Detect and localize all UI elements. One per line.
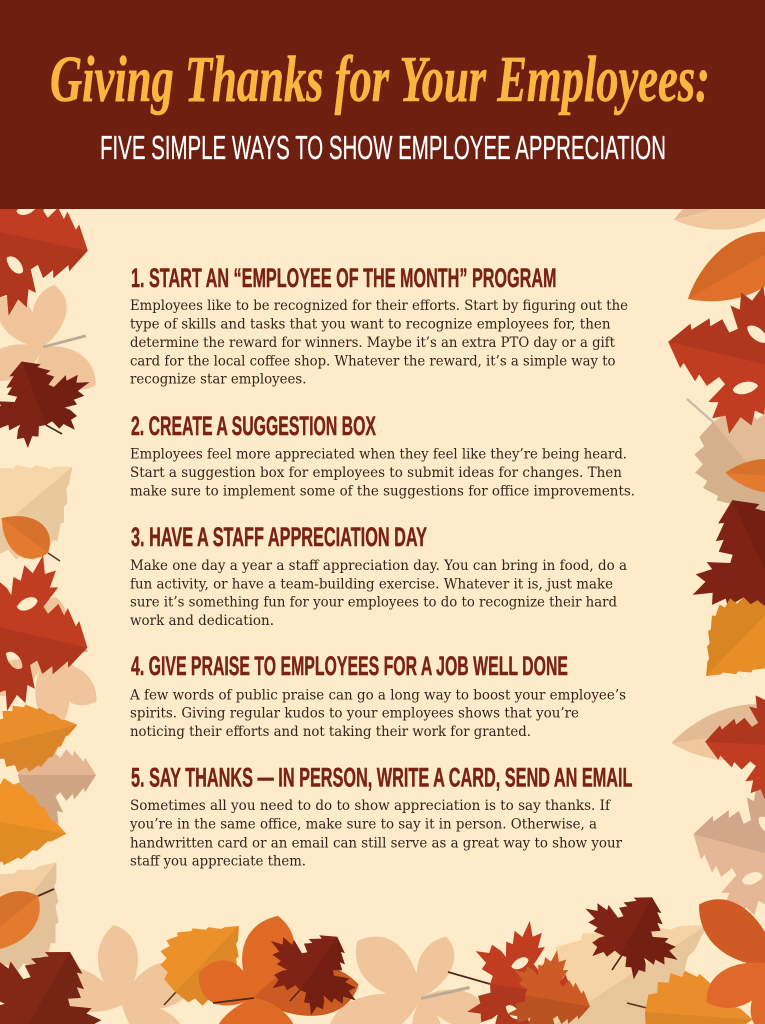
body 2: make sure to implement some of the suggestions for office improvements.: [130, 484, 635, 500]
section 2: [130, 411, 635, 500]
leaf: pale oval right: [667, 698, 765, 771]
body 5: staff you appreciate them.: [130, 854, 306, 870]
leaf: orange serrated left: [0, 772, 74, 877]
body 5: handwritten card or an email can still serve as a great way to show your: [130, 835, 622, 851]
body 3: work and dedication.: [130, 613, 274, 629]
leaf: dark maple bottom: [249, 907, 380, 1024]
body 1: type of skills and tasks that you want to recognize employees for, then: [130, 316, 611, 332]
leaf: orange oval small right: [724, 456, 765, 495]
leaf: dusty maple lower right: [674, 761, 765, 939]
leaf: pale chestnut bottom centre: [320, 922, 494, 1024]
leaf: dusty serrated right: [675, 390, 765, 554]
leaf: pale serrated bottom right: [495, 871, 743, 1024]
body 3: fun activity, or have a team-building exercise. Whatever it is, just make: [130, 576, 613, 592]
heading 3: 3. HAVE A STAFF APPRECIATION DAY: [131, 522, 427, 552]
leaf: golden serrated: [0, 692, 86, 779]
leaf: pale serrated left: [0, 428, 104, 578]
bottom leaf border: [0, 871, 756, 1024]
leaf: pale chestnut upper left: [0, 281, 104, 414]
leaf: pale chestnut mid left: [0, 593, 105, 729]
body 3: sure it’s something fun for your employees to do to recognize their hard: [130, 595, 617, 611]
body 1: [130, 298, 628, 388]
body 1: determine the reward for winners. Maybe it’s an extra PTO day or a gift: [130, 335, 615, 351]
leaf: red maple top left: [0, 147, 104, 329]
leaf: dark maple bottom right: [567, 872, 698, 993]
body 2: Employees feel more appreciated when they feel like they’re being heard.: [130, 446, 627, 462]
leaf: orange oval right: [674, 216, 765, 323]
body 1: recognize star employees.: [130, 372, 306, 388]
leaf: dark maple bottom left: [0, 916, 132, 1024]
leaf: dark maple right: [663, 468, 765, 652]
section 3: [130, 522, 627, 629]
section 4: [129, 651, 626, 740]
leaf: red maple mid left: [0, 542, 105, 725]
header band: [0, 0, 765, 209]
body 5: [129, 798, 622, 870]
section 5: [129, 763, 632, 870]
leaf: red maple bottom: [448, 914, 584, 1024]
leaf: golden serrated right: [677, 582, 765, 704]
body 2: Start a suggestion box for employees to submit ideas for changes. Then: [130, 465, 622, 481]
section 1: [130, 263, 628, 388]
leaf: pale serrated lower left: [0, 830, 97, 992]
body 1: card for the local coffee shop. Whatever the reward, it’s a simple way to: [130, 353, 616, 369]
body 4: [129, 687, 626, 740]
leaf: orange oval left: [0, 503, 60, 569]
body 1: Employees like to be recognized for their efforts. Start by figuring out the: [130, 298, 628, 314]
right leaf border: [651, 166, 765, 1024]
leaf: pale chestnut bottom left: [39, 925, 203, 1024]
leaf: dusty maple: [1, 717, 96, 833]
body 3: [130, 558, 627, 629]
body 5: you’re in the same office, make sure to say it in person. Otherwise, a: [129, 817, 597, 833]
body 3: Make one day a year a staff appreciation day. You can bring in food, do a: [130, 558, 627, 574]
leaf: orange chestnut bottom: [189, 908, 360, 1024]
leaf: golden serrated bottom: [145, 897, 269, 1021]
leaf: red maple right: [651, 268, 765, 450]
leaf: red maple lower right: [702, 684, 765, 806]
body 4: spirits. Giving regular kudos to your employees shows that you’re: [130, 706, 579, 722]
body 2: [130, 446, 635, 500]
leaf: rust maple bottom: [502, 944, 599, 1024]
heading 2: 2. CREATE A SUGGESTION BOX: [131, 411, 376, 441]
body 4: A few words of public praise can go a long way to boost your employee’s: [129, 687, 626, 703]
leaf: orange chestnut right: [686, 884, 765, 1024]
leaf: orange oval lower left: [0, 878, 54, 969]
leaf: dark maple left: [0, 341, 104, 459]
left leaf border: [0, 147, 105, 992]
body 5: Sometimes all you need to do to show appreciation is to say thanks. If: [130, 798, 611, 814]
leaf: pale oval top right: [667, 166, 765, 244]
leaf: golden bottom right: [627, 968, 756, 1024]
body 4: noticing their efforts and not taking their work for granted.: [130, 724, 531, 740]
